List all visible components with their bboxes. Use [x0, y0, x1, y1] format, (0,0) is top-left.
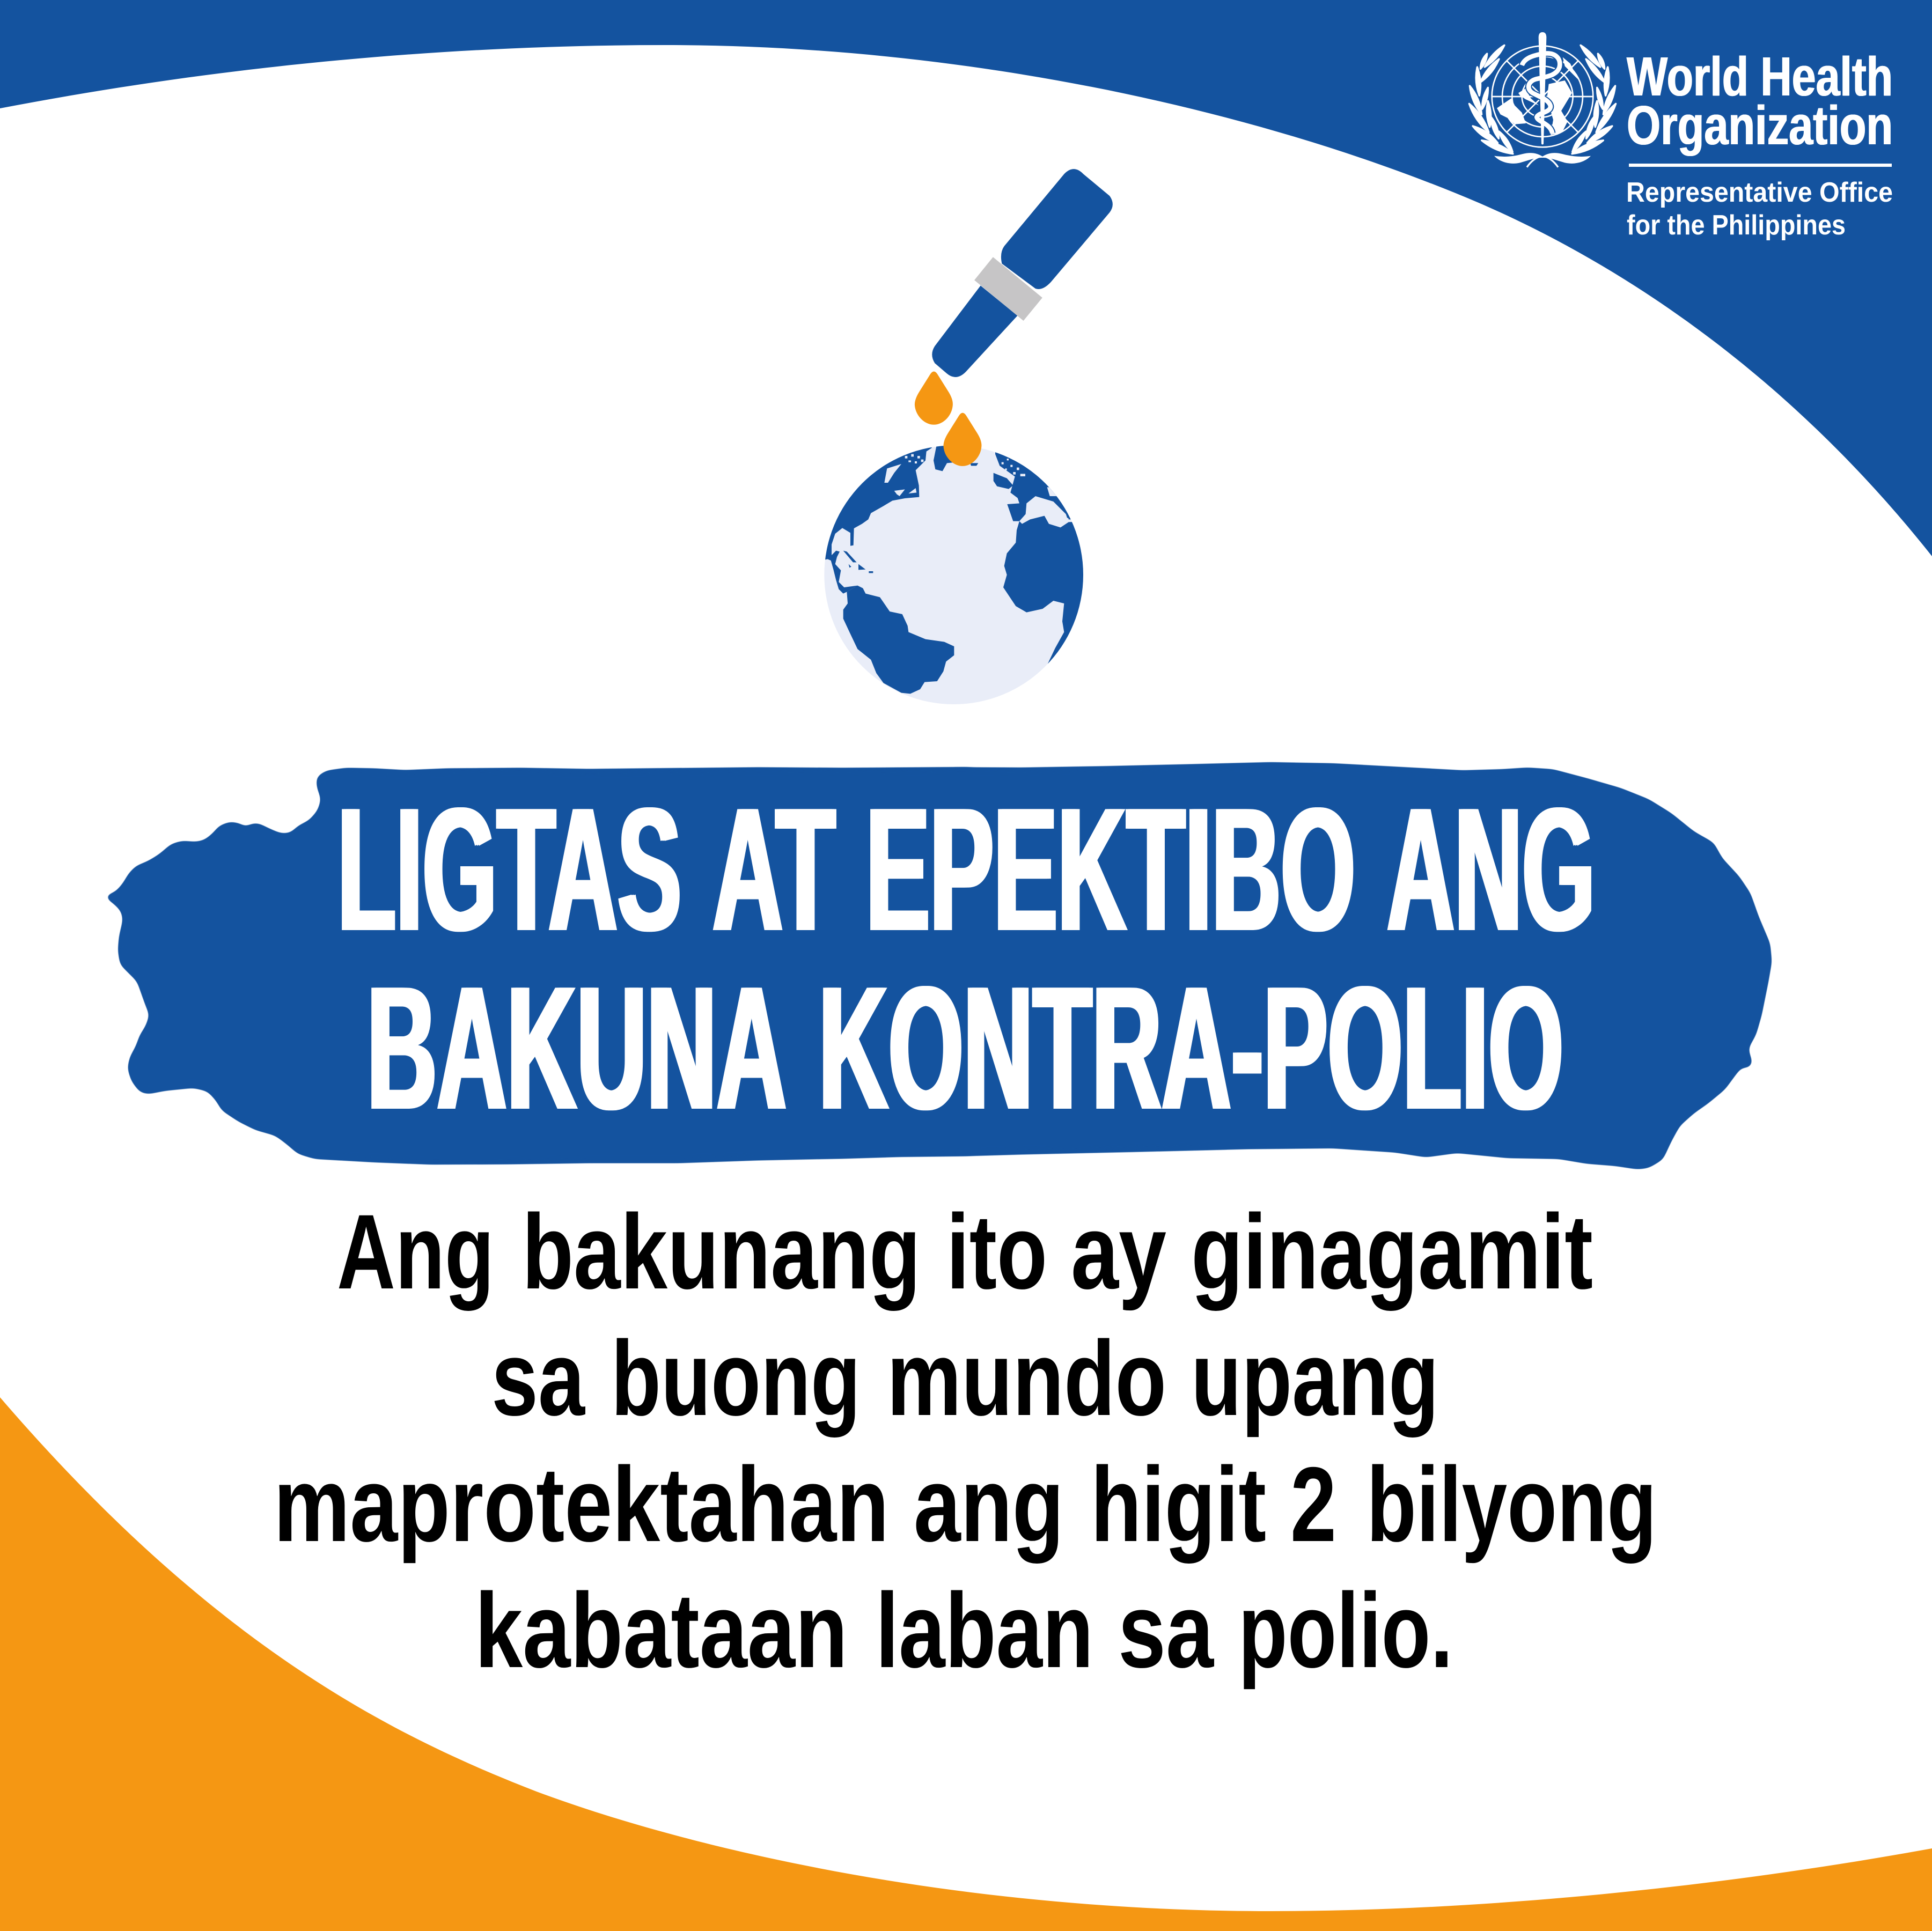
heading: LIGTAS: [337, 771, 681, 968]
emblem continents: [1497, 57, 1578, 135]
body text: sa: [1118, 1571, 1215, 1690]
WHO logo and office name: [1469, 32, 1893, 241]
body text: laban: [876, 1571, 1093, 1690]
dropper nozzle: [932, 285, 1017, 377]
dropper bulb: [1001, 169, 1113, 289]
body text: ang: [914, 1445, 1064, 1564]
body text: higit: [1091, 1445, 1266, 1564]
body text: mundo: [887, 1319, 1166, 1438]
vaccine drop on globe: [943, 413, 981, 466]
icon: globe: [821, 443, 1089, 704]
logo divider: [1629, 164, 1892, 167]
body text: bilyong: [1367, 1445, 1657, 1564]
heading: ANG: [1387, 771, 1595, 968]
heading: [337, 771, 1595, 1146]
emblem serpent: [1522, 53, 1560, 133]
title banner: [103, 762, 1772, 1169]
body text: ginagamit: [1191, 1192, 1593, 1311]
body text: 2: [1290, 1445, 1336, 1564]
body text: Ang: [337, 1192, 494, 1311]
body text: buong: [611, 1319, 861, 1438]
bottom orange curved band: [0, 1397, 1932, 1931]
brush-stroke background: [103, 762, 1772, 1169]
globe ocean: [824, 445, 1083, 704]
vaccine drop: [915, 372, 953, 425]
body text: polio.: [1238, 1571, 1453, 1690]
body text: [274, 1192, 1657, 1690]
office name: [1626, 177, 1893, 241]
heading: BAKUNA: [367, 949, 787, 1146]
emblem globe rings: [1492, 46, 1593, 147]
body text: bakunang: [522, 1192, 921, 1311]
heading: EPEKTIBO: [866, 771, 1355, 968]
top blue curved band: [0, 0, 1932, 556]
icon: vaccine dropper and drops: [915, 169, 1113, 466]
right laurel branch: [1572, 45, 1616, 154]
dropper collar: [974, 257, 1042, 321]
body text: maprotektahan: [274, 1445, 889, 1564]
office name: for the Philippines: [1627, 210, 1846, 241]
organization name: [1627, 46, 1893, 156]
heading: AT: [712, 771, 835, 968]
body text: sa: [491, 1319, 585, 1438]
icon: WHO emblem: [1469, 32, 1616, 167]
left laurel branch: [1469, 45, 1513, 154]
office name: Representative Office: [1626, 177, 1893, 208]
body text: kabataan: [475, 1571, 848, 1690]
body text: ito: [946, 1192, 1047, 1311]
globe continents: [821, 443, 1089, 694]
body text: upang: [1191, 1319, 1439, 1438]
emblem ribbon: [1494, 153, 1591, 167]
emblem staff: [1539, 32, 1546, 144]
body text: ay: [1071, 1192, 1166, 1311]
